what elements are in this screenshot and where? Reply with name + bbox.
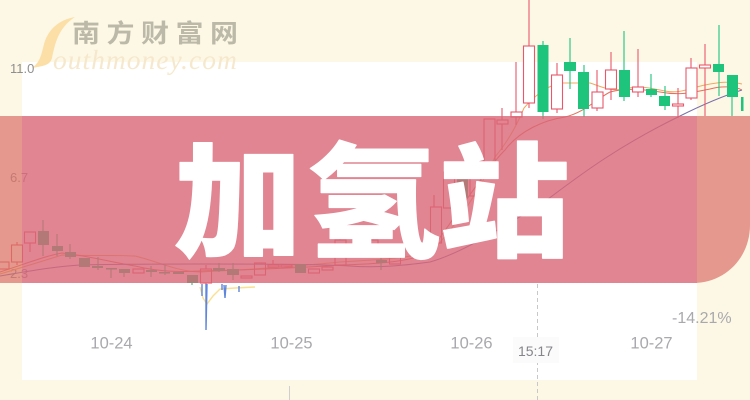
moving average lines [0, 82, 742, 276]
banner left edge [0, 116, 22, 283]
title: 站 [439, 103, 570, 283]
lower indicator spikes [200, 284, 255, 330]
title: 氢 [307, 105, 440, 284]
y axis labels: 11.0 [10, 61, 34, 76]
falling candles [38, 25, 744, 285]
x axis labels [90, 334, 673, 352]
logo latin name: outhmoney.com [53, 44, 238, 75]
x axis labels: 10-27 [630, 334, 673, 352]
banner over panel [22, 116, 697, 283]
white chart panel [22, 62, 697, 380]
title [174, 103, 570, 284]
x axis labels: 10-25 [270, 334, 313, 352]
y axis labels: 2.3 [10, 266, 28, 281]
logo Chinese name: 南方财富网 [72, 13, 244, 50]
y axis labels: 6.7 [10, 170, 28, 185]
logo: southmoney [32, 13, 244, 75]
title banner [0, 116, 750, 283]
x axis labels: 10-24 [90, 334, 133, 352]
banner right edge [693, 116, 750, 283]
percent label: -14.21% [672, 310, 732, 327]
title: 加 [174, 104, 302, 283]
crosshair line [536, 284, 538, 400]
candlestick chart [0, 0, 744, 287]
crosshair time label: 15:17 [518, 343, 553, 359]
rising candles [0, 0, 710, 287]
y axis labels [10, 61, 34, 281]
icon: S swoosh [32, 17, 75, 68]
x axis labels: 10-26 [450, 334, 493, 352]
crosshair time label [513, 337, 559, 363]
